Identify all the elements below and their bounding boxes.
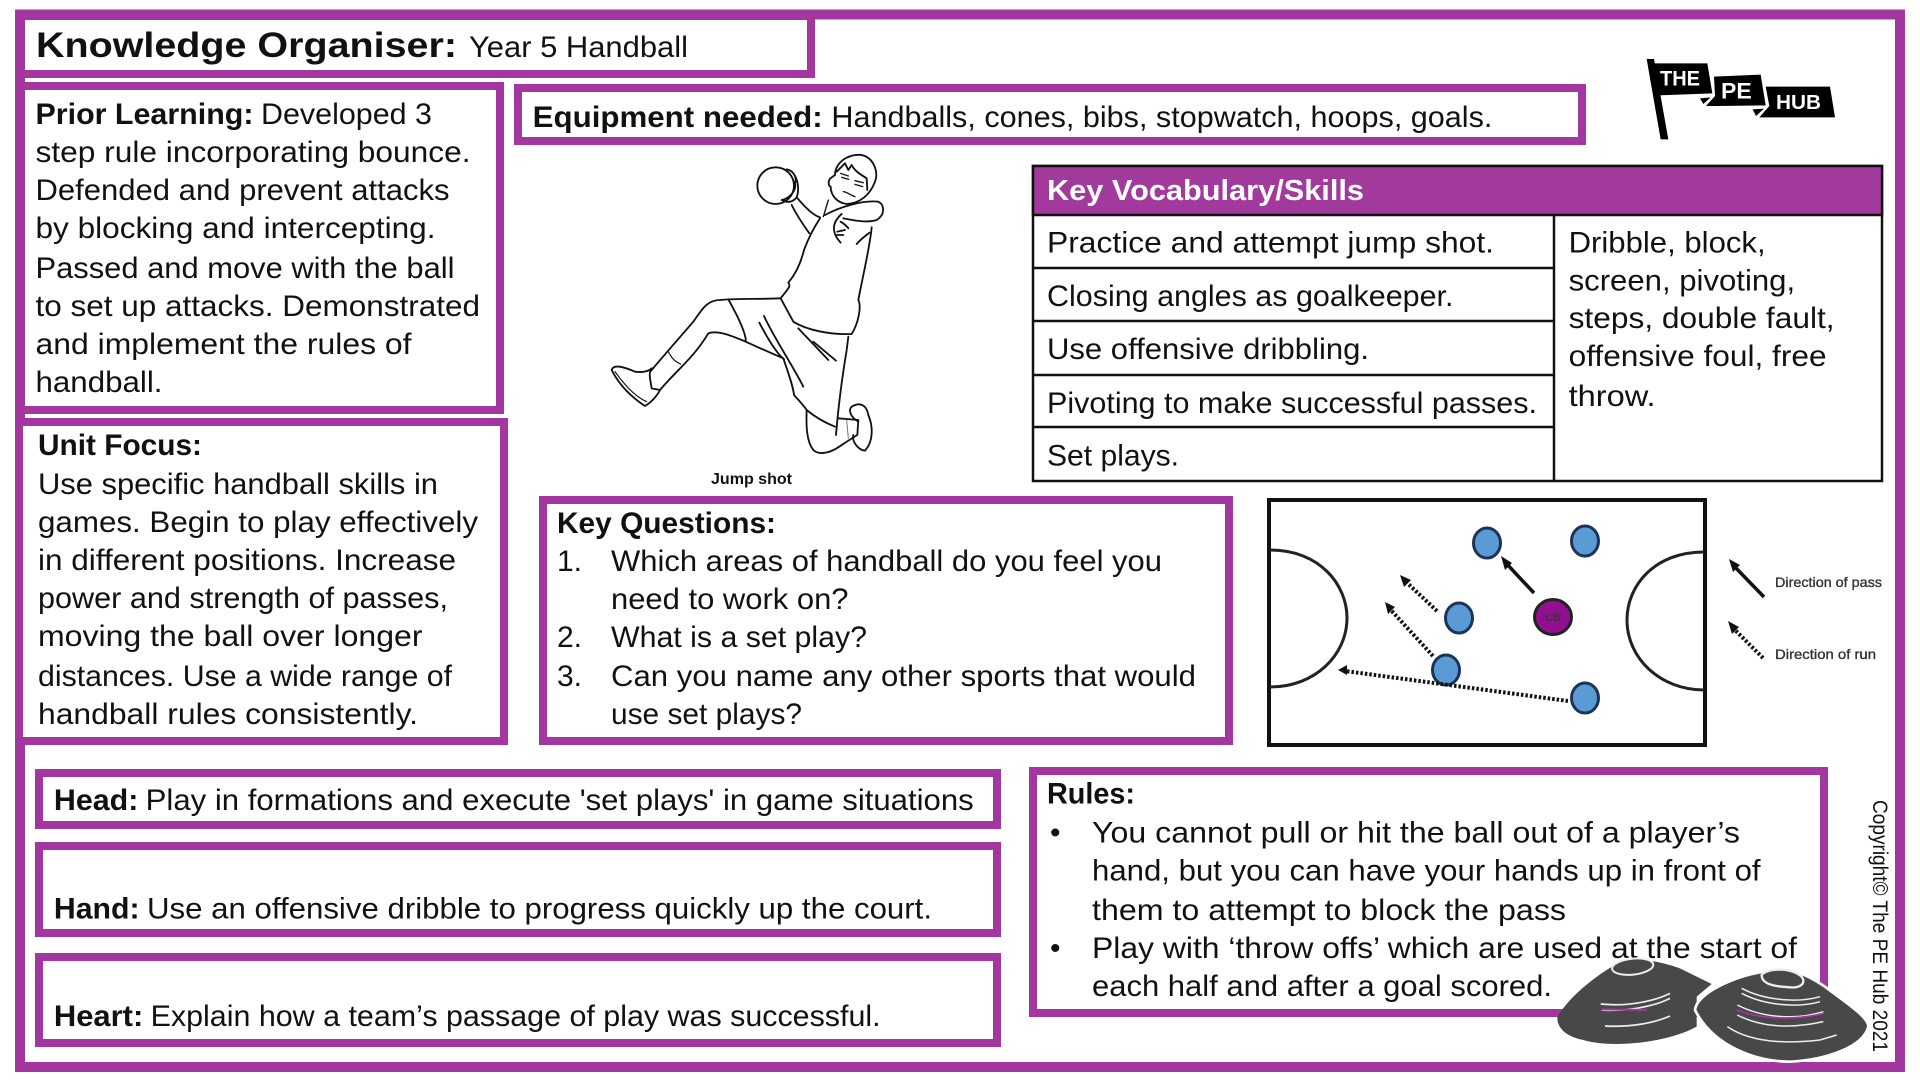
panel: key questions: need to work on? [611,583,848,616]
panel: prior learning: handball. [36,366,162,399]
panel: rules: them to attempt to block the pass [1092,894,1566,927]
legend: direction of pass and run: Direction of pass [1775,574,1882,590]
panel: heart: Heart: [54,1000,143,1033]
panel: prior learning: and implement the rules of [36,328,412,361]
logo: The PE Hub: HUB [1776,92,1821,114]
illustration: jump shot player [612,155,883,453]
table: key vocabulary and skills: screen, pivoting, [1569,264,1795,297]
panel: unit focus: in different positions. Increase [38,544,456,577]
panel: unit focus: power and strength of passes, [38,582,448,615]
icon: ball [757,167,794,204]
panel: unit focus: Use specific handball skills in [38,468,438,501]
panel: prior learning: step rule incorporating bounce. [36,136,470,169]
panel: head: Play in formations and execute 'set plays' in game situations [146,784,974,817]
title panel [21,16,811,74]
table: key vocabulary and skills [1033,166,1882,481]
table: key vocabulary and skills: throw. [1569,380,1656,413]
table: key vocabulary and skills: Practice and attempt jump shot. [1047,226,1494,260]
panel: prior learning: Prior Learning: [36,98,254,131]
legend: direction of pass and run: Direction of run [1775,646,1876,662]
table: key vocabulary and skills: Pivoting to make successful passes. [1047,387,1537,420]
panel: rules: You cannot pull or hit the ball out of a player’s [1092,817,1740,850]
panel: key questions [543,500,1229,741]
logo: The PE Hub: THE [1660,67,1700,90]
panel: prior learning: Developed 3 [261,98,432,131]
panel: unit focus: Unit Focus: [38,429,202,462]
title panel: Knowledge Organiser: [36,26,457,65]
title panel: Year 5 Handball [469,31,688,64]
panel: head: Head: [54,784,138,817]
legend: direction of pass and run [1728,559,1882,662]
panel: prior learning [21,86,500,410]
panel: prior learning: to set up attacks. Demonstrated [36,290,480,323]
panel: equipment needed [518,88,1582,141]
panel: hand: Use an offensive dribble to progress quickly up the court. [147,893,932,926]
panel: unit focus: distances. Use a wide range of [38,660,453,693]
table: key vocabulary and skills: steps, double fault, [1569,302,1835,335]
panel: head [39,773,997,825]
diagram: handball court set play [1269,500,1705,745]
panel: rules: • [1050,817,1061,850]
panel: heart [39,957,997,1043]
table: key vocabulary and skills: Dribble, block, [1569,226,1766,260]
panel: unit focus: moving the ball over longer [38,620,423,653]
panel: key questions: Which areas of handball do you feel you [611,545,1162,578]
panel: prior learning: Passed and move with the ball [36,252,455,285]
panel: equipment needed: Handballs, cones, bibs, stopwatch, hoops, goals. [831,101,1492,134]
panel: rules: Play with ‘throw offs’ which are used at the start of [1092,932,1798,965]
logo: The PE Hub: PE [1721,78,1752,103]
panel: equipment needed: Equipment needed: [533,101,823,134]
table: key vocabulary and skills: offensive foul, free [1569,340,1827,373]
panel: prior learning: Defended and prevent attacks [36,174,450,207]
panel: hand: Hand: [54,893,140,926]
panel: key questions: 1. [557,545,582,578]
table: key vocabulary and skills: Use offensive dribbling. [1047,333,1369,366]
panel: key questions: What is a set play? [611,621,867,654]
table: key vocabulary and skills: Set plays. [1047,440,1179,472]
panel: key questions: Can you name any other sports that would [611,660,1196,693]
panel: rules [1033,771,1824,1013]
panel: hand [39,846,997,933]
panel: key questions: use set plays? [611,698,802,731]
panel: key questions: Key Questions: [557,507,776,540]
logo: The PE Hub [1647,59,1835,139]
panel: rules: each half and after a goal scored. [1092,970,1552,1003]
diagram: handball court set play: CB [1545,612,1560,624]
panel: rules: hand, but you can have your hands up in front of [1092,855,1761,888]
panel: heart: Explain how a team’s passage of play was successful. [151,1000,881,1033]
panel: key questions: 3. [557,660,582,693]
panel: rules: Rules: [1047,778,1135,810]
table: key vocabulary and skills: Key Vocabulary/Skills [1047,175,1364,207]
caption: jump shot: Jump shot [711,471,793,488]
panel: rules: • [1050,932,1061,965]
panel: unit focus: games. Begin to play effectively [38,506,478,539]
panel: unit focus [19,422,504,741]
panel: unit focus: handball rules consistently. [38,698,418,731]
panel: key questions: 2. [557,621,582,654]
icon: cones [1557,957,1868,1062]
panel: prior learning: by blocking and intercepting. [36,212,436,245]
table: key vocabulary and skills: Closing angles as goalkeeper. [1047,280,1454,313]
copyright note: Copyright© The PE Hub 2021 [1868,800,1891,1052]
